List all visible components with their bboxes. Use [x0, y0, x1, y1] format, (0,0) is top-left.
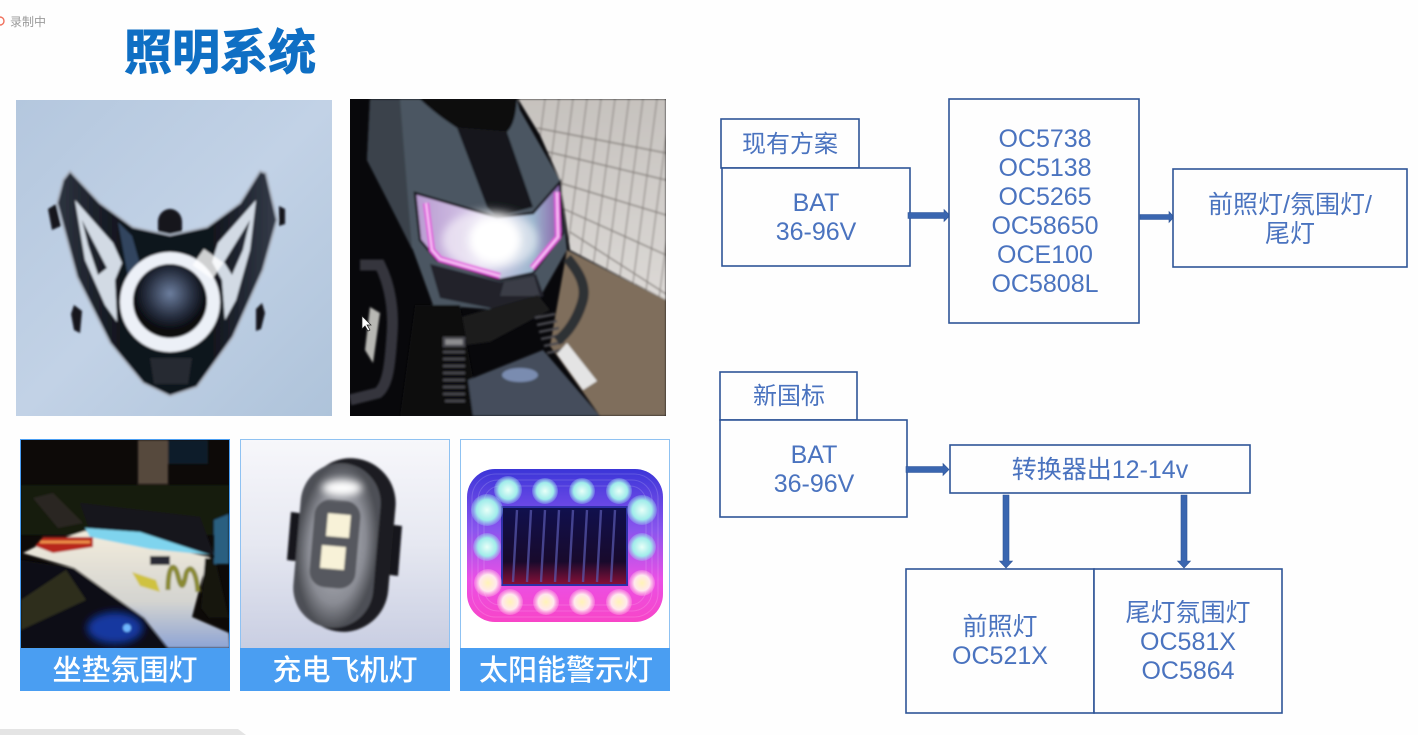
box: driver chips: OC58650: [991, 212, 1099, 240]
tiled wall: [516, 99, 666, 302]
arrow: battery to chips: [908, 210, 950, 222]
box: converter: 转换器出12-14v: [1012, 456, 1189, 484]
box: driver chips: OC5265: [998, 183, 1092, 211]
box: lights: 前照灯/氛围灯/: [1208, 191, 1372, 219]
box: converter: [950, 445, 1250, 493]
box: tail and ambient light: OC581X: [1140, 628, 1236, 656]
box: battery: 36-96V: [776, 218, 857, 246]
arrow: converter to headlight: [1000, 495, 1012, 568]
arrow: battery to converter: [906, 464, 949, 476]
lens rings: [472, 474, 658, 617]
suspension block: [462, 296, 549, 346]
box: tail and ambient light: 尾灯氛围灯: [1125, 599, 1251, 627]
box: driver chips: OC5738: [998, 125, 1092, 153]
box: driver chips: OC5138: [998, 154, 1092, 182]
tab: existing solution: 现有方案: [742, 131, 838, 158]
centre stripe: [457, 128, 533, 217]
box: battery: [722, 168, 910, 266]
tab: new national standard: [720, 372, 857, 420]
pink daytime lights: [426, 192, 558, 276]
LEDs: [471, 476, 657, 615]
box: driver chips: OCE100: [997, 241, 1093, 269]
diagram: new national standard: [720, 372, 1282, 713]
box: battery: [720, 420, 907, 517]
box: battery: 36-96V: [774, 470, 855, 498]
box: tail and ambient light: [1094, 569, 1282, 713]
box: headlight: [906, 569, 1094, 713]
box: driver chips: OC5808L: [991, 270, 1099, 298]
caption: 坐垫氛围灯: [52, 654, 198, 687]
cursor: [362, 316, 371, 331]
panel: seat ambient light: [20, 439, 230, 691]
arrow: converter to tail light: [1178, 495, 1190, 568]
arrow: chips to lights: [1140, 212, 1174, 222]
solar cell: [502, 507, 627, 585]
lower grille: [430, 264, 544, 310]
fork springs: [443, 314, 567, 401]
box: headlight: OC521X: [952, 642, 1048, 670]
box: lights: 尾灯: [1265, 220, 1315, 248]
box: tail and ambient light: OC5864: [1141, 657, 1235, 685]
guard bars: [350, 265, 392, 400]
tab: new national standard: 新国标: [753, 383, 825, 410]
windscreen: [420, 99, 517, 132]
caption: 充电飞机灯: [272, 654, 418, 687]
caption: 太阳能警示灯: [479, 654, 653, 687]
scooter body: [367, 99, 567, 310]
tab: existing solution: [721, 119, 859, 168]
bottom gray tab: [0, 729, 246, 735]
side clips: [287, 512, 402, 576]
photo: headlamp assembly: [16, 100, 332, 416]
title: 照明系统: [124, 27, 316, 80]
box: headlight: 前照灯: [962, 613, 1038, 641]
panel: rechargeable aircraft light: [240, 439, 450, 691]
box: driver chips: [949, 99, 1139, 323]
box: battery: BAT: [791, 441, 837, 469]
ground: [550, 250, 666, 416]
shoes and fender: [557, 343, 597, 390]
recording indicator: 录制中: [10, 14, 46, 29]
diagram: existing solution: [721, 99, 1407, 323]
panel: solar warning light: [460, 439, 670, 691]
box: lights: [1173, 169, 1407, 267]
box: battery: BAT: [793, 189, 839, 217]
headlight: [415, 182, 563, 280]
photo: scooter front with purple light: [350, 99, 699, 416]
